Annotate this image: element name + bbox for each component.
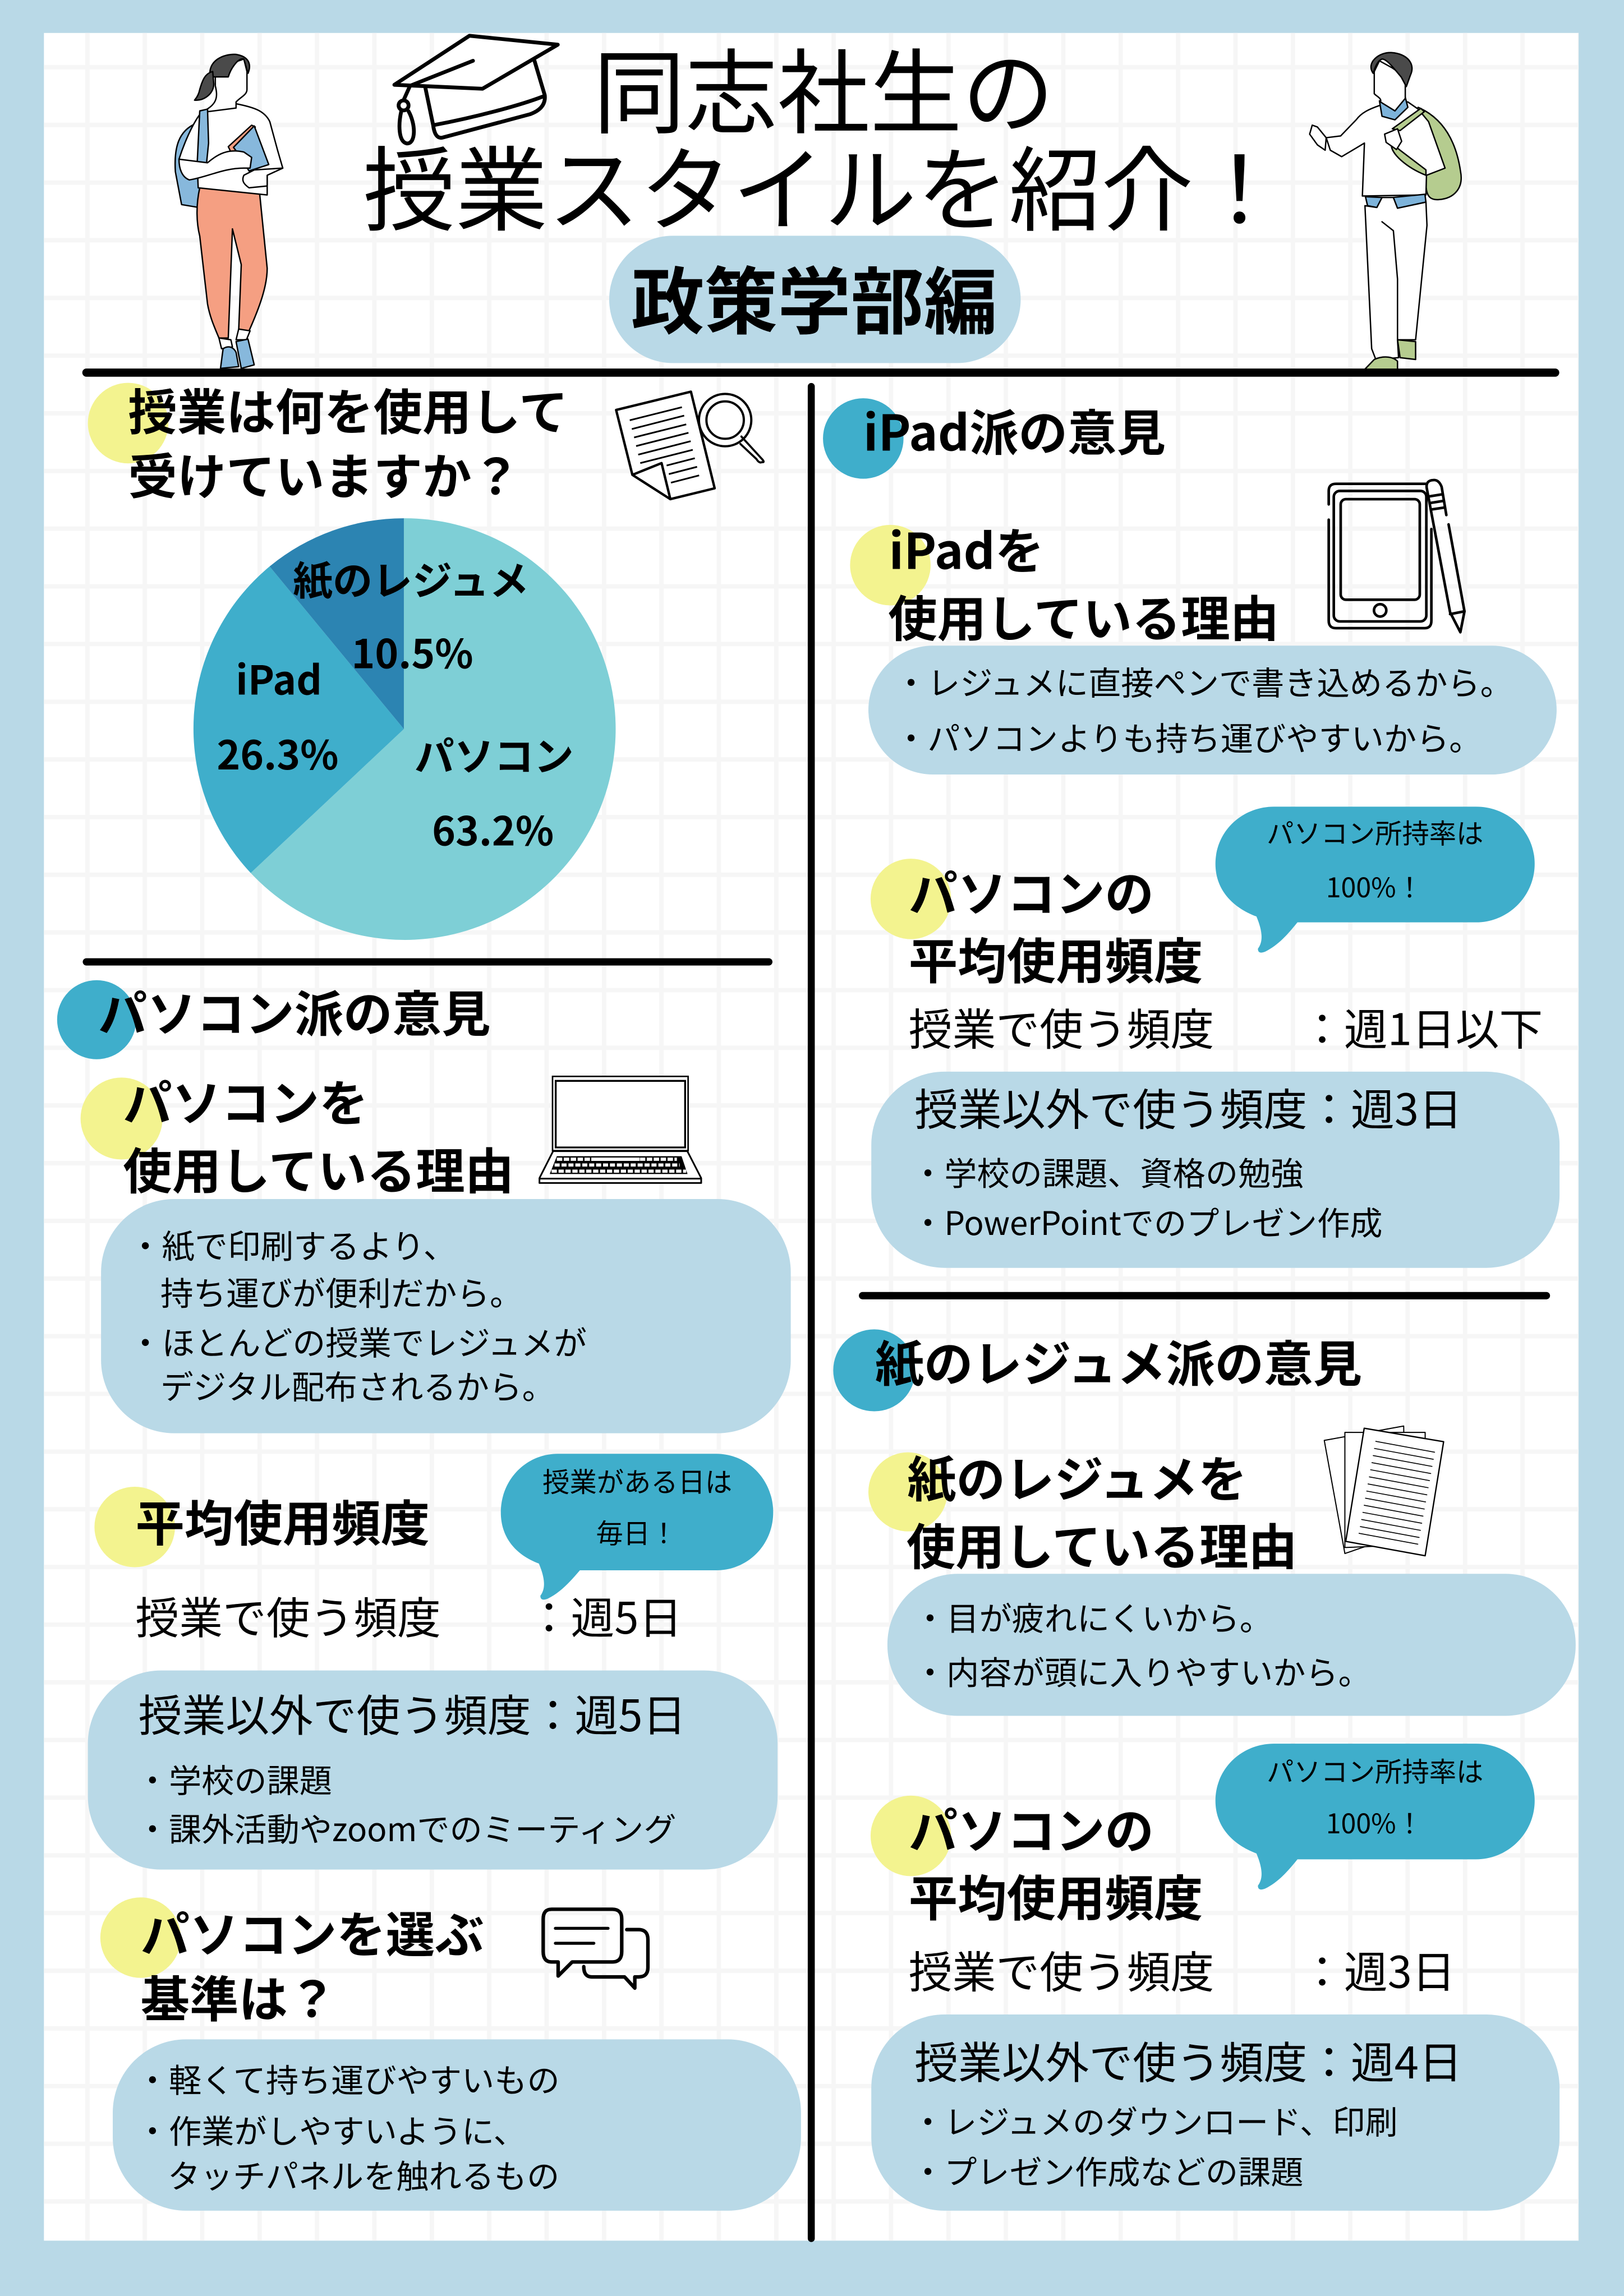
pie chart — [194, 518, 616, 940]
reasons box: ・ほとんどの授業でレジュメが — [129, 1317, 587, 1364]
yellow marker — [868, 1453, 947, 1532]
usage in class: 授業で使う頻度 — [909, 995, 1214, 1058]
yellow marker — [88, 383, 168, 463]
section marker — [823, 398, 904, 479]
panel: paper users opinions — [833, 1326, 1576, 2211]
heading: reason for PC: 使用している理由 — [123, 1133, 514, 1204]
illustration: student with green bag pointing — [1310, 53, 1461, 372]
heading: average frequency: 平均使用頻度 — [909, 1860, 1203, 1930]
panel: iPad users opinions — [823, 394, 1559, 1268]
pie labels: 63.2% — [432, 800, 554, 857]
reasons box: ・目が疲れにくいから。 — [914, 1592, 1272, 1640]
heading: average frequency: パソコンの — [909, 856, 1154, 926]
criteria box: タッチパネルを触れるもの — [168, 2150, 559, 2198]
heading: reason for iPad: iPadを — [889, 513, 1044, 584]
reasons box — [887, 1574, 1576, 1716]
usage outside class box: ・プレゼン作成などの課題 — [912, 2146, 1303, 2193]
heading: reason for paper — [907, 1441, 1298, 1579]
title: 同志社生の — [593, 20, 1054, 153]
speech bubble: PC ownership — [1216, 806, 1535, 953]
heading: reason for iPad — [888, 513, 1279, 651]
usage outside class box: 授業以外で使う頻度：週5日 — [139, 1681, 686, 1744]
title: 授業スタイルを紹介！ — [363, 117, 1286, 250]
speech bubble: every class day — [501, 1454, 773, 1599]
yellow marker — [871, 859, 951, 939]
speech bubble: PC ownership: 100%！ — [1326, 866, 1423, 905]
usage in class: ：週1日以下 — [1300, 995, 1543, 1058]
heading: selection criteria: パソコンを選ぶ — [141, 1897, 484, 1967]
speech bubble: every class day: 毎日！ — [596, 1511, 677, 1551]
usage outside class box — [88, 1671, 778, 1870]
usage outside class box: ・学校の課題、資格の勉強 — [912, 1147, 1303, 1195]
heading: average frequency — [909, 856, 1203, 994]
usage in class: 授業で使う頻度 — [909, 1938, 1214, 2001]
pie labels: 26.3% — [217, 724, 338, 781]
heading: question: 受けていますか？ — [128, 439, 521, 509]
usage outside class box: ・PowerPointでのプレゼン作成 — [912, 1197, 1382, 1244]
usage outside class box — [871, 2014, 1559, 2211]
speech bubble: PC ownership: パソコン所持率は — [1267, 1750, 1483, 1789]
usage outside class box — [871, 1072, 1559, 1268]
pie labels — [217, 550, 574, 857]
usage in class — [135, 1584, 682, 1647]
column divider — [810, 386, 813, 2238]
usage outside class box: ・レジュメのダウンロード、印刷 — [912, 2096, 1398, 2143]
title — [363, 20, 1286, 250]
icon: tablet and pen — [1329, 480, 1465, 632]
panel: device usage question — [88, 374, 763, 940]
section marker — [57, 980, 136, 1059]
reasons box — [868, 646, 1557, 774]
pie labels: iPad — [236, 649, 322, 707]
usage outside class box: ・学校の課題 — [136, 1754, 332, 1802]
heading: reason for iPad: 使用している理由 — [888, 580, 1279, 651]
yellow marker — [94, 1487, 175, 1567]
pie labels: 紙のレジュメ — [293, 550, 529, 607]
section heading: iPad派の意見 — [863, 394, 1166, 465]
yellow marker — [100, 1897, 181, 1978]
reasons box: ・紙で印刷するより、 — [129, 1220, 456, 1268]
reasons box — [101, 1199, 791, 1433]
usage outside class box: 授業以外で使う頻度：週3日 — [914, 1075, 1462, 1138]
pie labels: パソコン — [415, 725, 574, 782]
reasons box: ・内容が頭に入りやすいから。 — [914, 1647, 1371, 1694]
heading: reason for PC — [123, 1065, 514, 1204]
icon: document and magnifier — [616, 391, 763, 499]
usage in class — [909, 1938, 1456, 2001]
usage outside class box: 授業以外で使う頻度：週4日 — [914, 2028, 1462, 2091]
icon: laptop — [540, 1076, 701, 1183]
speech bubble: PC ownership — [1216, 1744, 1535, 1889]
heading: selection criteria: 基準は？ — [141, 1961, 337, 2031]
heading: average frequency — [909, 1792, 1203, 1930]
section marker — [833, 1329, 915, 1412]
yellow marker — [871, 1796, 951, 1876]
pie labels: 10.5% — [352, 623, 473, 680]
reasons box: ・パソコンよりも持ち運びやすいから。 — [895, 712, 1482, 760]
heading: question — [128, 374, 568, 509]
section heading: パソコン派の意見 — [98, 976, 490, 1046]
icon: chat bubbles — [543, 1909, 648, 1988]
usage in class: ：週5日 — [527, 1584, 682, 1647]
left divider — [86, 961, 769, 963]
heading: average frequency: パソコンの — [909, 1792, 1154, 1863]
heading: average frequency: 平均使用頻度 — [909, 923, 1203, 994]
section heading: 紙のレジュメ派の意見 — [875, 1326, 1362, 1396]
reasons box: デジタル配布されるから。 — [160, 1361, 555, 1408]
usage in class — [909, 995, 1543, 1058]
panel: PC users opinions — [57, 976, 801, 2211]
speech bubble: every class day: 授業がある日は — [542, 1460, 732, 1500]
heading: question: 授業は何を使用して — [128, 374, 568, 445]
right divider — [863, 1294, 1547, 1297]
subtitle pill: faculty: 政策学部編 — [631, 243, 997, 349]
criteria box: ・軽くて持ち運びやすいもの — [136, 2054, 560, 2101]
icon: graduation cap — [394, 36, 558, 144]
criteria box: ・作業がしやすいように、 — [136, 2105, 526, 2153]
usage in class: ：週3日 — [1300, 1938, 1456, 2001]
yellow marker — [850, 525, 931, 605]
icon: stack of papers — [1324, 1426, 1443, 1556]
top divider — [86, 371, 1555, 374]
speech bubble: PC ownership: パソコン所持率は — [1267, 812, 1483, 851]
heading: reason for PC: パソコンを — [123, 1065, 368, 1136]
usage outside class box: ・課外活動やzoomでのミーティング — [136, 1803, 677, 1851]
heading: selection criteria — [141, 1897, 484, 2031]
heading: reason for paper: 使用している理由 — [907, 1509, 1298, 1579]
heading: reason for paper: 紙のレジュメを — [907, 1441, 1247, 1512]
illustration: student with backpack and books — [175, 54, 283, 368]
reasons box: ・レジュメに直接ペンで書き込めるから。 — [895, 657, 1513, 704]
reasons box: 持ち運びが便利だから。 — [160, 1267, 523, 1315]
criteria box — [113, 2039, 801, 2211]
yellow marker — [81, 1077, 163, 1160]
heading: average frequency: 平均使用頻度 — [135, 1485, 430, 1556]
speech bubble: PC ownership: 100%！ — [1326, 1802, 1423, 1841]
usage in class: 授業で使う頻度 — [135, 1584, 441, 1647]
